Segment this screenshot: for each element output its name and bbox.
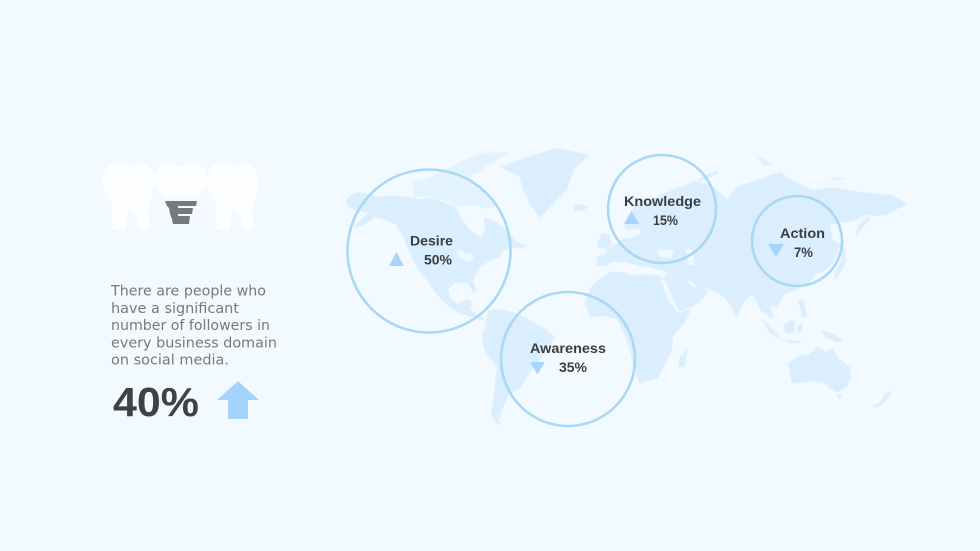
icon: down triangle <box>530 362 545 374</box>
text block: description <box>110 284 277 368</box>
map: arctic islands <box>412 152 512 209</box>
icon: right tooth <box>207 164 258 231</box>
label: Action: Action <box>780 225 825 241</box>
text block: description: There are people who <box>110 284 266 300</box>
icon: middle crown <box>155 164 207 197</box>
circle: Action <box>752 196 842 286</box>
circle: Desire <box>348 170 510 332</box>
label: Desire: Desire <box>410 232 453 248</box>
value: 35%: 35% <box>559 359 588 375</box>
text block: description: every business domain <box>111 336 277 352</box>
value: 50%: 50% <box>424 252 453 268</box>
icon: down triangle <box>768 244 784 257</box>
world map <box>345 148 908 425</box>
map: lakes and seas <box>455 249 698 301</box>
text block: description: on social media. <box>111 352 229 368</box>
icon: implant screw <box>165 201 197 224</box>
icon: up triangle <box>389 252 404 266</box>
stat: 40%: 40% <box>113 379 199 425</box>
label: Awareness: Awareness <box>530 340 606 356</box>
value: 7%: 7% <box>794 244 814 260</box>
icon: dental implant between teeth <box>103 164 258 231</box>
text block: description: have a significant <box>111 301 239 317</box>
arrow: up <box>217 381 259 419</box>
text block: description: number of followers in <box>111 318 270 334</box>
circle: Knowledge <box>608 155 716 263</box>
value: 15%: 15% <box>653 212 678 228</box>
map: land masses <box>345 148 908 425</box>
label: Knowledge: Knowledge <box>624 193 701 209</box>
icon: left tooth <box>103 164 154 231</box>
icon: up triangle <box>624 211 639 224</box>
circle: Awareness <box>501 292 635 426</box>
